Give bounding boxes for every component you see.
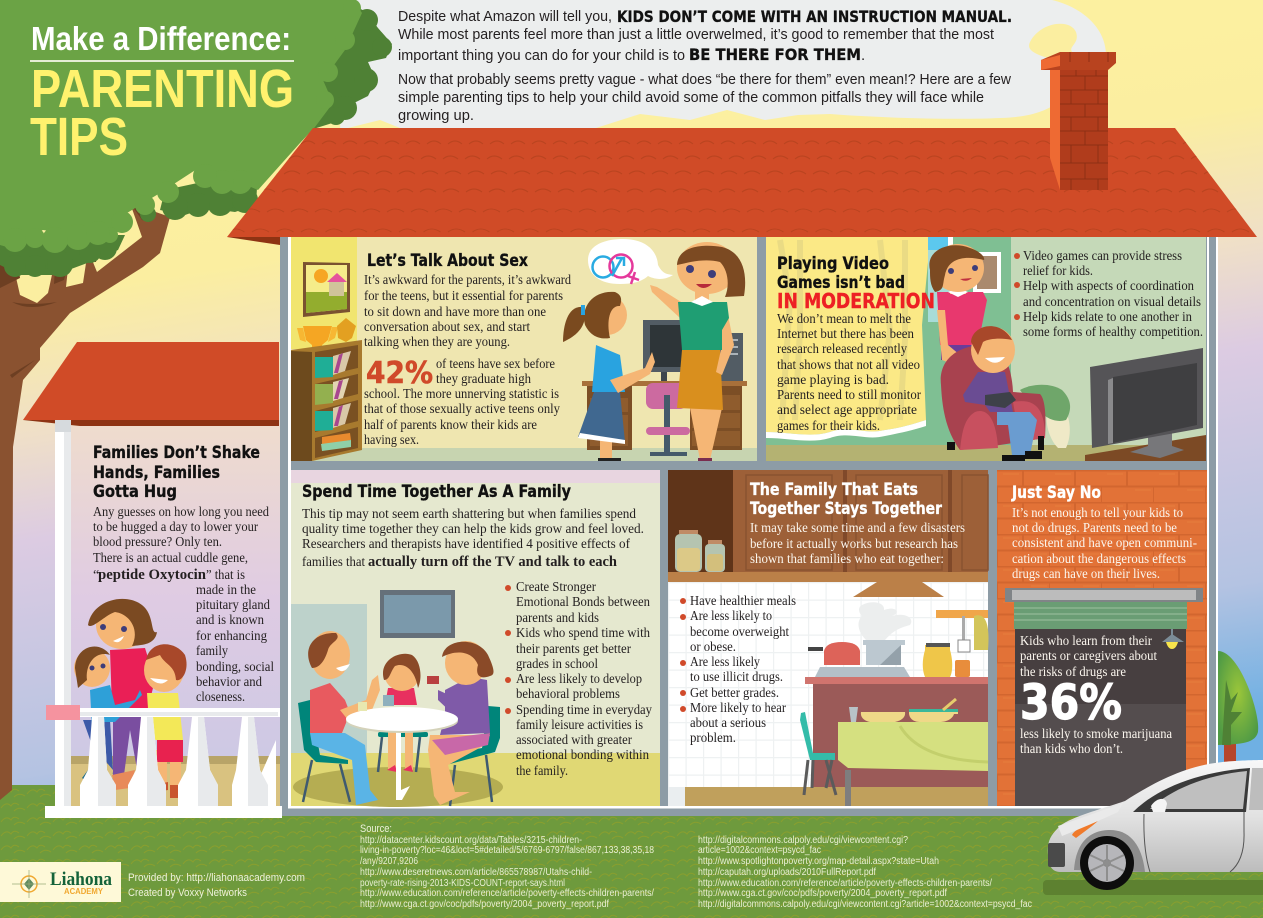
text: drugs intro: consistent and have open communi-: [1012, 536, 1197, 551]
heading: families hug: Gotta Hug: [93, 482, 177, 502]
dining chair: [800, 712, 836, 795]
illustration: family at table: [298, 631, 500, 806]
text: video games intro: research released recently: [777, 342, 907, 357]
text: sex statistic: having sex.: [364, 433, 419, 448]
text: less likely: less likely to smoke marijuana: [1020, 727, 1173, 742]
text: oxytocin: to be hugged a day to lower your: [93, 520, 258, 535]
text: oxytocin: for enhancing: [196, 629, 267, 644]
trophy and shield: [297, 318, 356, 348]
list: family time benefits: family leisure activities is: [516, 718, 643, 733]
list: family time benefits: associated with greater: [516, 733, 632, 748]
steam: [859, 602, 911, 640]
stove and pots: [808, 640, 910, 677]
text: sex statistic: half of parents know their kids are: [364, 418, 537, 433]
text: video games intro: Parents need to still monitor: [777, 388, 921, 403]
floor: [766, 445, 1206, 461]
footer logo: [0, 862, 121, 902]
grass lawn: [0, 785, 1263, 918]
house frame: [280, 237, 1218, 816]
list: family time benefits: emotional bonding within: [516, 748, 649, 763]
heading: families hug: [93, 443, 260, 502]
title: TIPS: [30, 107, 128, 167]
dad: [310, 733, 378, 805]
text: video games intro: game playing is bad.: [777, 373, 889, 388]
text: oxytocin: There is an actual cuddle gene,: [93, 551, 248, 566]
door: [291, 604, 367, 753]
mom: [428, 735, 490, 805]
footer logo: Liahona: [50, 869, 112, 890]
text: video games intro: [777, 312, 921, 434]
intro text: Despite what Amazon will tell you,: [398, 8, 612, 25]
panel: spend time together: [291, 470, 660, 807]
speech bubble with gender symbols: [588, 239, 673, 284]
list: eating benefits: Have healthier meals: [690, 594, 796, 609]
footer logo: ACADEMY: [64, 887, 104, 896]
title: [30, 20, 294, 167]
list: video game benefits: and concentration on visual details: [1023, 295, 1201, 310]
text: eating intro: shown that families who eat together:: [750, 552, 944, 567]
porch roof: [23, 342, 279, 426]
car shadow: [1043, 880, 1263, 895]
illustration: mother standing: [929, 244, 987, 365]
list: eating benefits: More likely to hear: [690, 701, 786, 716]
sources column one: http://datacenter.kidscount.org/data/Tables/3215-children-: [360, 835, 582, 846]
sources column one: [360, 823, 654, 910]
text: family time intro: [302, 507, 644, 570]
sources column two: http://www.education.com/reference/article/poverty-effects-children-parents/: [698, 878, 992, 889]
text: less likely: than kids who don’t.: [1020, 742, 1123, 757]
garage lamp: [1162, 629, 1184, 649]
heading: video games: Playing Video: [777, 254, 889, 274]
list: family time benefits: the family.: [516, 764, 568, 779]
intro text: KIDS DON’T COME WITH AN INSTRUCTION MANUAL.: [617, 7, 1012, 26]
heading: video games: IN MODERATION: [777, 289, 935, 313]
text: sex statistic: [364, 357, 560, 448]
jars: [675, 530, 725, 572]
jars on counter: [923, 643, 970, 677]
sources column one: http://www.deseretnews.com/article/865578987/Utahs-child-: [360, 867, 592, 878]
cloud behind intro text: [340, 0, 1106, 130]
smoke gap in the cloud: [1029, 24, 1077, 58]
illustration: boy with controller: [963, 326, 1042, 461]
text: eating intro: before it actually works but research has: [750, 537, 958, 552]
utensil rack: [936, 610, 988, 652]
list: eating benefits: or obese.: [690, 640, 736, 655]
main roof: [227, 128, 1257, 245]
chairs: [298, 700, 500, 765]
intro text: [398, 7, 1012, 124]
text: family time intro: Researchers and therapists have identified 4 positive effects of: [302, 537, 630, 552]
text: sex statistic: of teens have sex before: [436, 357, 555, 372]
text: drugs intro: not do drugs. Parents need to be: [1012, 521, 1177, 536]
text: oxytocin: made in the: [196, 583, 256, 598]
intro text: While most parents feel more than just a little overwelmed, it’s good to remember that the most: [398, 26, 995, 43]
list: family time benefits: grades in school: [516, 657, 598, 672]
text: less likely: [1020, 727, 1173, 757]
sources column one: /any/9207,9206: [360, 856, 418, 867]
heading: families hug: Hands, Families: [93, 463, 220, 483]
text: video games intro: Internet but there has been: [777, 327, 914, 342]
table: [396, 728, 410, 800]
desk chair: [646, 383, 690, 456]
sources column two: [698, 835, 1032, 910]
list: eating benefits: to use illicit drugs.: [690, 670, 783, 685]
sources column two: http://www.spotlightonpoverty.org/map-detail.aspx?state=Utah: [698, 856, 939, 867]
text: drugs intro: cation about the dangerous effects: [1012, 552, 1186, 567]
footer credits: Created by Voxxy Networks: [128, 887, 247, 899]
plant and vase: [1020, 385, 1070, 448]
list: family time benefits: [505, 580, 652, 779]
text: oxytocin: ” that is: [206, 568, 245, 583]
text: sex statistic: school. The more unnerving statistic is: [364, 387, 559, 402]
list: family time benefits: Spending time in everyday: [516, 703, 652, 718]
sources column one: http://www.education.com/reference/article/poverty-effects-children-parents/: [360, 888, 654, 899]
text: video games intro: and select age appropriate: [777, 403, 917, 418]
text: video games intro: We don’t mean to melt the: [777, 312, 911, 327]
text: oxytocin: closeness.: [196, 690, 245, 705]
range hood: [853, 582, 944, 597]
sources column two: http://www.cga.ct.gov/coc/pdfs/poverty/2004_poverty_report.pdf: [698, 888, 947, 899]
bookshelf: [291, 340, 362, 461]
list: video game benefits: some forms of healthy competition.: [1023, 325, 1203, 340]
illustration: mother hugging children: [74, 599, 187, 798]
footer credits: Provided by: http://liahonaacademy.com: [128, 872, 305, 884]
panel: let's talk about sex: [291, 237, 757, 461]
list: family time benefits: Are less likely to develop: [516, 672, 642, 687]
heading: eating together: Together Stays Together: [750, 499, 943, 519]
intro text: simple parenting tips to help your child avoid some of the common pitfalls they will face while: [398, 89, 984, 106]
list: video game benefits: relief for kids.: [1023, 264, 1093, 279]
list: eating benefits: about a serious: [690, 716, 766, 731]
curtain: [766, 237, 928, 441]
list: family time benefits: parents and kids: [516, 611, 599, 626]
picture frame: [303, 262, 350, 317]
text: sex intro: talking when they are young.: [364, 335, 510, 350]
illustration: armchair: [941, 345, 1045, 450]
panel: eating together: [668, 470, 988, 806]
wall tv: [380, 590, 455, 638]
text: sex intro: [364, 273, 571, 350]
heading: video games: Games isn’t bad: [777, 273, 905, 293]
text: eating intro: It may take some time and a few disasters: [750, 521, 965, 536]
panel: video games: [766, 237, 1206, 461]
footer credits: [128, 872, 305, 899]
statistic: 36%: 36%: [1020, 675, 1122, 731]
statistic: 42%: 42%: [366, 356, 433, 391]
text: oxytocin: [93, 505, 274, 705]
heading: eating together: The Family That Eats: [750, 480, 918, 500]
desk and computer: [582, 320, 747, 450]
text: oxytocin: blood pressure? Only ten.: [93, 535, 222, 550]
list: eating benefits: problem.: [690, 731, 736, 746]
television: [1085, 348, 1206, 461]
sources column two: http://caputah.org/uploads/2010FullReport.pdf: [698, 867, 876, 878]
list: video game benefits: Help with aspects of coordination: [1023, 279, 1194, 294]
background tree on the right: [1218, 651, 1258, 780]
panel: just say no: [997, 470, 1207, 806]
sources column two: http://digitalcommons.calpoly.edu/cgi/viewcontent.cgi?: [698, 835, 908, 846]
title: PARENTING: [31, 59, 294, 119]
text: kids who learn: Kids who learn from their: [1020, 634, 1152, 649]
text: oxytocin: bonding, social: [196, 660, 274, 675]
list: family time benefits: Emotional Bonds between: [516, 595, 650, 610]
intro text: important thing you can do for your child is to: [398, 47, 685, 64]
list: eating benefits: Get better grades.: [690, 686, 779, 701]
chimney: [1041, 52, 1116, 190]
text: video games intro: that shows that not all video: [777, 358, 920, 373]
list: eating benefits: become overweight: [690, 625, 789, 640]
text: video games intro: games for their kids.: [777, 419, 880, 434]
garage door: [1005, 588, 1203, 806]
illustration: girl student: [563, 292, 655, 461]
text: oxytocin: pituitary gland: [196, 598, 270, 613]
sources column one: Source:: [360, 823, 392, 835]
list: family time benefits: Kids who spend time with: [516, 626, 650, 641]
intro text: Now that probably seems pretty vague - what does “be there for them” even mean!? Here are a few: [398, 71, 1011, 88]
text: drugs intro: drugs can have on their lives.: [1012, 567, 1160, 582]
dining table: [838, 699, 988, 806]
text: sex statistic: that of those sexually active teens only: [364, 402, 560, 417]
text: eating intro: [750, 521, 965, 567]
text: oxytocin: family: [196, 644, 228, 659]
car: [1048, 760, 1263, 890]
list: video game benefits: [1014, 249, 1203, 340]
text: sex intro: conversation about sex, and start: [364, 320, 530, 335]
list: family time benefits: Create Stronger: [516, 580, 596, 595]
text: oxytocin: behavior and: [196, 675, 262, 690]
list: eating benefits: [680, 594, 796, 746]
text: kids who learn: parents or caregivers about: [1020, 649, 1157, 664]
title: Make a Difference:: [31, 20, 291, 57]
text: sex statistic: they graduate high: [436, 372, 531, 387]
text: family time intro: actually turn off the TV and talk to each: [368, 554, 618, 570]
heading: eating together: [750, 480, 943, 519]
list: family time benefits: behavioral problems: [516, 687, 620, 702]
text: drugs intro: [1012, 506, 1197, 582]
text: oxytocin: Any guesses on how long you need: [93, 505, 269, 520]
sources column one: http://www.cga.ct.gov/coc/pdfs/poverty/2004_poverty_report.pdf: [360, 899, 609, 910]
text: kids who learn: [1020, 634, 1157, 680]
text: family time intro: This tip may not seem earth shattering but when families spend: [302, 507, 636, 522]
list: family time benefits: their parents get better: [516, 642, 631, 657]
heading: family time: Spend Time Together As A Family: [302, 482, 571, 502]
heading: video games: [777, 254, 935, 313]
text: oxytocin: “: [93, 568, 99, 583]
text: family time intro: families that: [302, 555, 365, 570]
heading: sex: Let’s Talk About Sex: [367, 251, 528, 271]
list: video game benefits: Help kids relate to one another in: [1023, 310, 1192, 325]
text: sex intro: It’s awkward for the parents, it’s awkward: [364, 273, 571, 288]
list: eating benefits: Are less likely: [690, 655, 760, 670]
panel: families hug (porch): [45, 420, 282, 818]
intro text: growing up.: [398, 107, 474, 124]
text: sex intro: for the teens, but it essential for parents: [364, 289, 563, 304]
rug: [293, 767, 503, 807]
list: video game benefits: Video games can provide stress: [1023, 249, 1182, 264]
sources column two: http://digitalcommons.calpoly.edu/cgi/viewcontent.cgi?article=1002&context=psycd_fac: [698, 899, 1032, 910]
illustration: teacher mother: [650, 242, 745, 461]
sources column two: article=1002&context=psycd_fac: [698, 845, 821, 856]
porch railing and column: [45, 420, 282, 818]
intro text: .: [861, 47, 865, 64]
text: kids who learn: the risks of drugs are: [1020, 665, 1126, 680]
list: eating benefits: Are less likely to: [690, 609, 772, 624]
intro text: BE THERE FOR THEM: [689, 45, 861, 64]
tree trunk: [0, 203, 170, 800]
tree crown: [0, 0, 392, 277]
heading: just say no: Just Say No: [1011, 483, 1101, 503]
sources column one: living-in-poverty?loc=46&loct=5#detailed/5/6769-6797/false/867,133,38,35,18: [360, 845, 654, 856]
text: sex intro: to sit down and have more than one: [364, 305, 546, 320]
text: oxytocin: peptide Oxytocin: [98, 567, 207, 583]
text: drugs intro: It’s not enough to tell your kids to: [1012, 506, 1183, 521]
counter: [805, 677, 988, 787]
wall picture: [973, 252, 1001, 293]
heading: families hug: Families Don’t Shake: [93, 443, 260, 463]
girl: [388, 720, 396, 770]
text: family time intro: quality time together they can help the kids grow and feel loved.: [302, 522, 644, 537]
text: oxytocin: and is known: [196, 613, 264, 628]
sources column one: poverty-rate-rising-2013-KIDS-COUNT-report-says.html: [360, 878, 565, 889]
window: [928, 237, 953, 322]
